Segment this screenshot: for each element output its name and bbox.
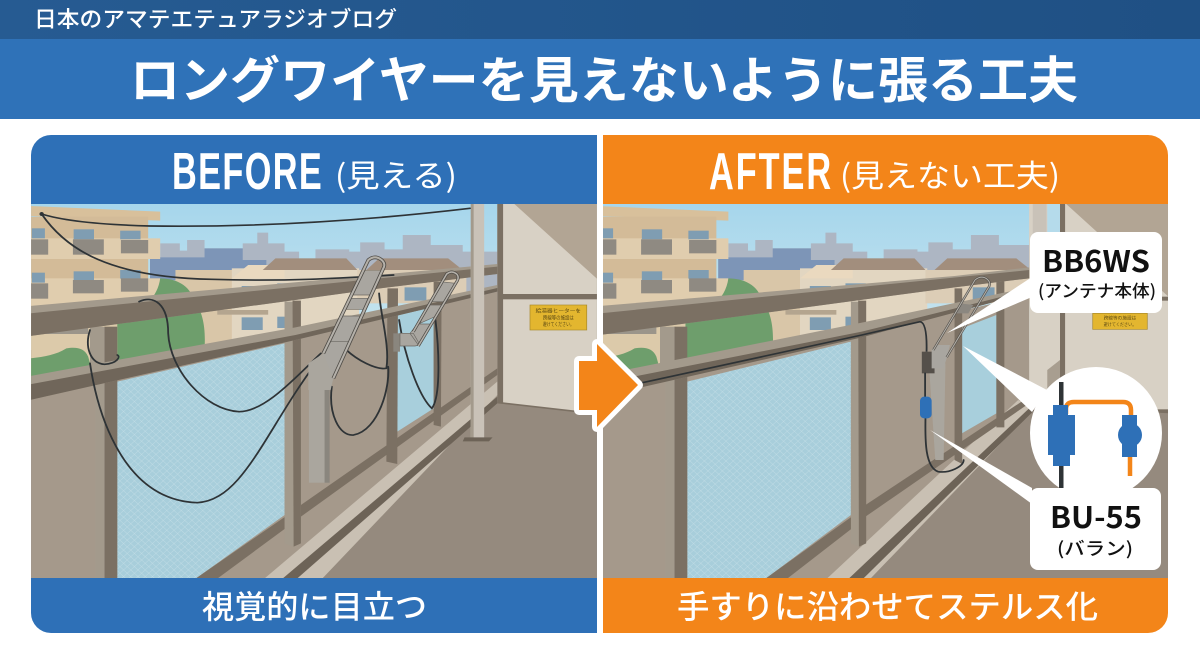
blue balun on wire	[920, 397, 932, 418]
arrow: before to after	[579, 344, 638, 427]
before heading	[172, 143, 457, 201]
callout: BU-55	[930, 430, 1161, 570]
before caption: 視覚的に目立つ	[202, 582, 427, 628]
lower handrail	[31, 285, 497, 384]
mesh panel	[687, 342, 851, 580]
balcony panels	[634, 298, 1030, 397]
orange jumper wire	[1066, 402, 1131, 476]
callout: BB6WS: BB6WS	[1042, 237, 1150, 281]
antenna: main loop element	[308, 257, 384, 390]
wall	[1029, 203, 1171, 417]
antenna mount post	[309, 390, 330, 483]
glass panel	[397, 307, 434, 432]
before illustration: balcony with visible loose wires	[30, 200, 603, 580]
mesh panel	[117, 343, 285, 580]
loose antenna wires	[39, 208, 470, 503]
black coax	[1059, 382, 1064, 490]
yellow notice sign: 避けてください。	[543, 320, 574, 328]
before panel frame	[31, 135, 597, 633]
posts	[90, 282, 442, 580]
callout: BB6WS	[947, 232, 1162, 333]
balcony floor	[872, 407, 1168, 578]
yellow notice sign	[530, 305, 587, 330]
lower rails	[764, 397, 1029, 580]
yellow notice sign	[1093, 313, 1147, 329]
yellow notice sign: 跨線等の施設は	[543, 314, 574, 321]
callout: BU-55: (バラン)	[1057, 535, 1133, 561]
balcony floor	[323, 404, 597, 578]
after heading: (見えない工夫)	[840, 151, 1060, 196]
curb	[825, 400, 1035, 580]
antenna mount and junction box	[922, 352, 945, 460]
callout: BB6WS: (アンテナ本体)	[1038, 277, 1156, 302]
after heading	[709, 143, 1060, 201]
after panel frame	[603, 135, 1168, 633]
hidden wire along handrail	[636, 322, 964, 472]
after caption: 手すりに沿わせてステルス化	[677, 582, 1098, 628]
panel: after	[598, 135, 1171, 633]
after illustration: wire hidden along handrail	[598, 200, 1171, 580]
antenna: far element	[393, 272, 458, 352]
yellow notice sign: 給湯器ヒーターを	[536, 307, 581, 315]
after heading: AFTER	[709, 143, 831, 201]
right blue connector	[1118, 415, 1142, 457]
balcony panels	[30, 292, 497, 580]
pole	[463, 203, 493, 441]
panel: before	[30, 135, 603, 633]
posts	[660, 280, 1004, 580]
before heading: (見える)	[335, 151, 457, 196]
top handrail	[600, 267, 1029, 335]
lower handrail	[629, 291, 1010, 380]
before heading: BEFORE	[172, 143, 322, 201]
yellow notice sign: 跨線等の施設は	[1104, 315, 1137, 321]
top bar	[0, 0, 1200, 39]
top handrail	[30, 264, 497, 336]
yellow notice sign: 避けてください。	[1104, 321, 1136, 328]
blog name: 日本のアマテエテュアラジオブログ	[34, 2, 397, 34]
pointer to detail	[963, 346, 1047, 412]
title band	[0, 39, 1200, 119]
callout: balun enlarged detail	[963, 346, 1162, 499]
lower rails	[194, 368, 497, 580]
glass panel	[962, 315, 996, 433]
curb	[263, 382, 497, 580]
antenna: BB6WS element	[932, 277, 990, 368]
title: ロングワイヤーを見えないように張る工夫	[130, 41, 1078, 113]
wall and door frame	[497, 203, 603, 417]
left blue connector	[1048, 405, 1075, 466]
callout: BU-55: BU-55	[1050, 493, 1142, 537]
divider	[597, 135, 603, 633]
detail circle	[1030, 367, 1162, 499]
